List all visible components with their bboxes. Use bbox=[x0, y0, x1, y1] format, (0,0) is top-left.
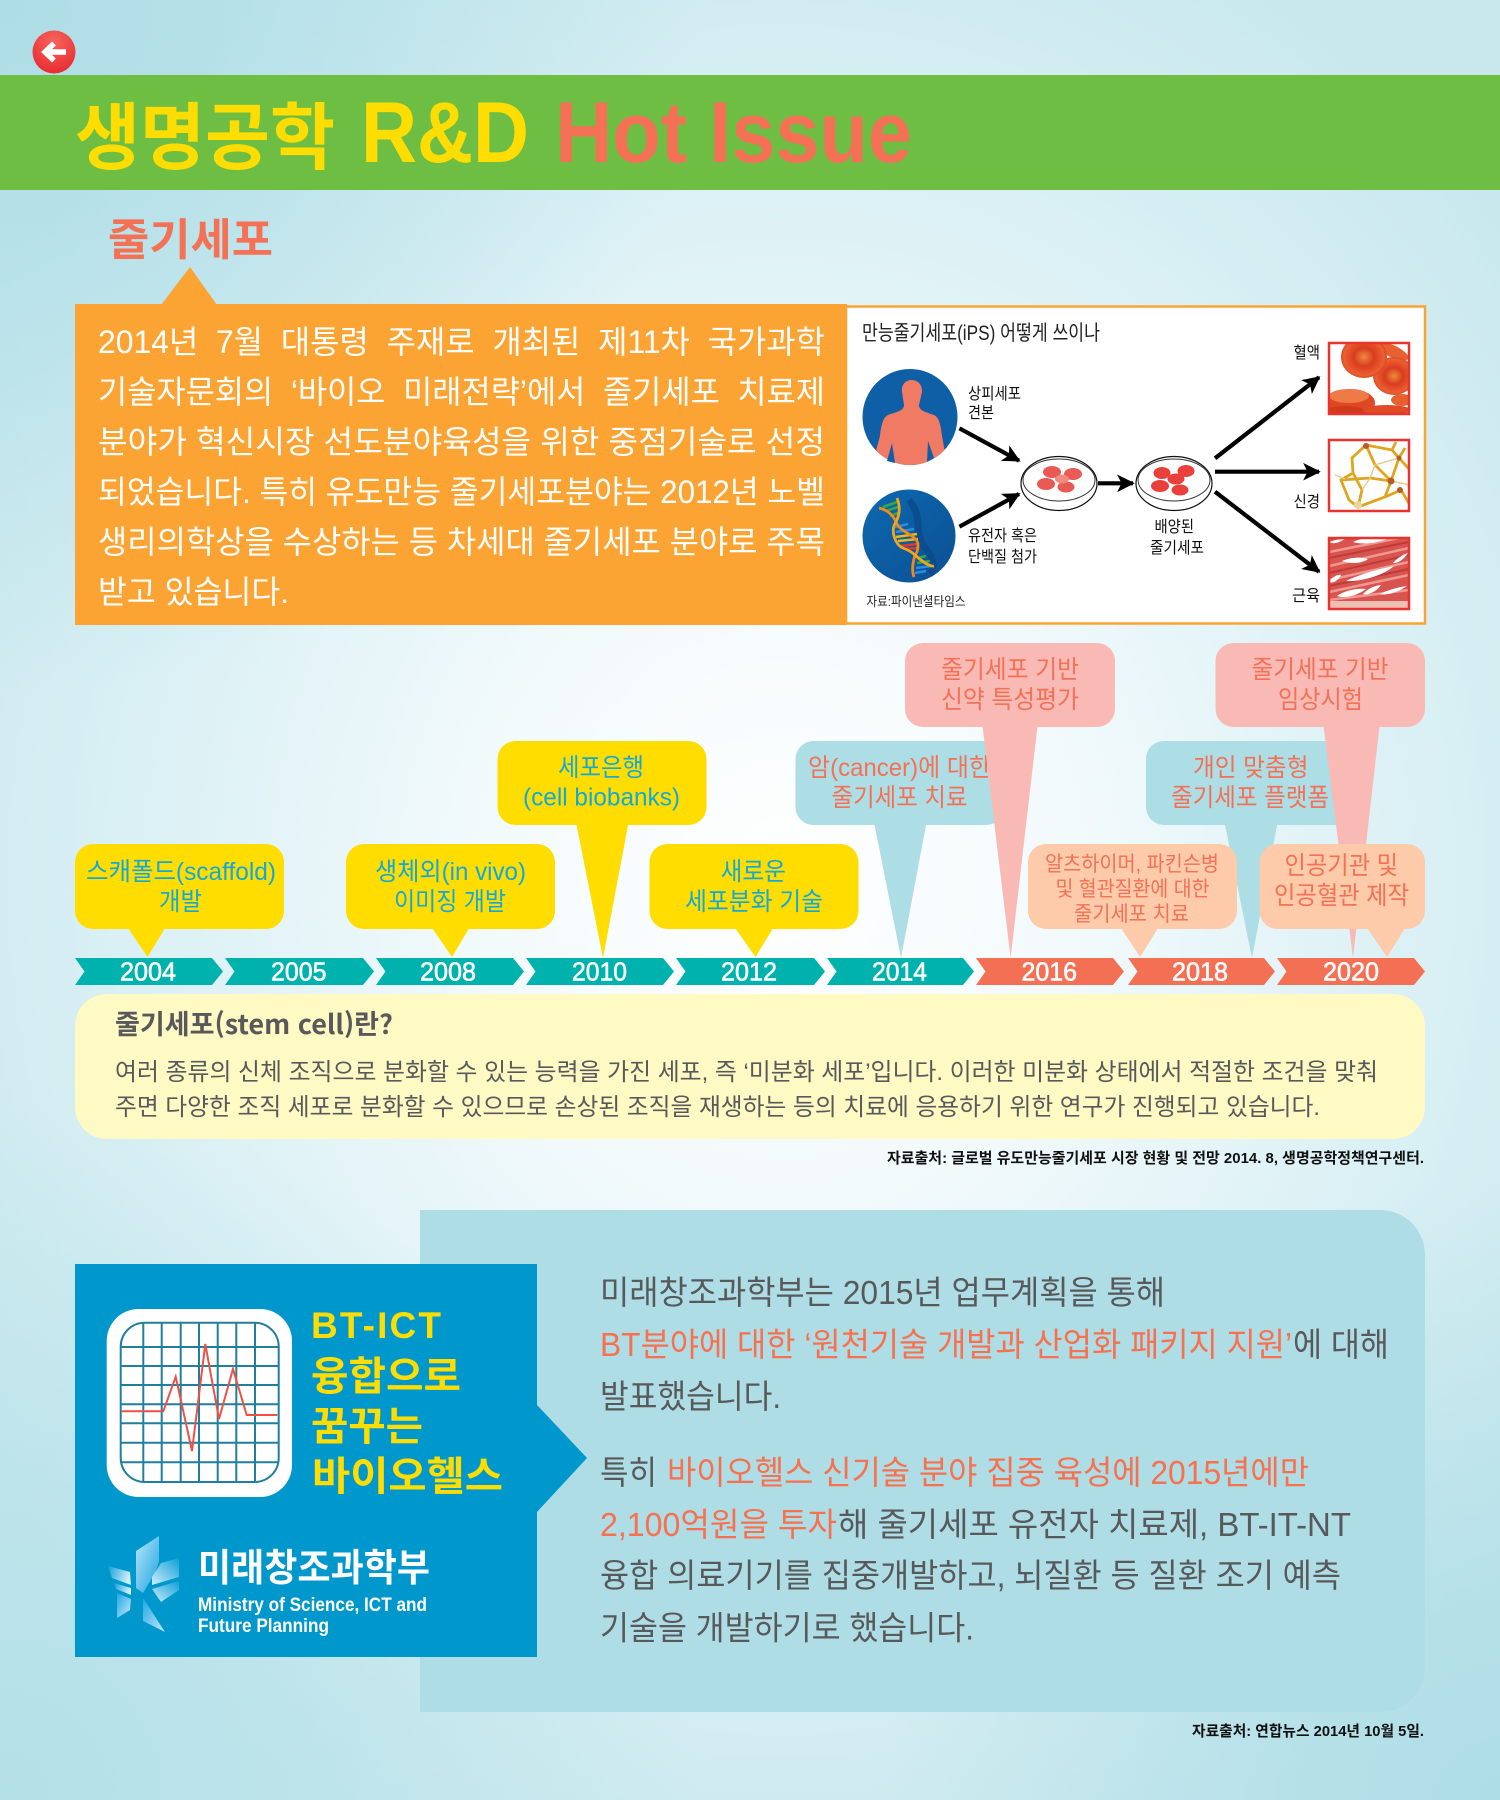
callout: artificial organs: 인공혈관 제작 bbox=[1274, 882, 1409, 910]
callout: neurological therapy: 및 혈관질환에 대한 bbox=[1056, 878, 1210, 901]
year 2008: 2008 bbox=[420, 956, 476, 986]
icon: back button bbox=[32, 30, 76, 74]
icon: cultured dish bbox=[1136, 456, 1212, 510]
year 2008 bbox=[376, 956, 524, 986]
panel body: 주면 다양한 조직 세포로 분화할 수 있으므로 손상된 조직을 재생하는 등의 치료에 응용하기 위한 연구가 진행되고 있습니다. bbox=[115, 1094, 1320, 1121]
label: add gene or protein: 유전자 혹은 bbox=[968, 527, 1037, 545]
callout: cancer therapy bbox=[796, 741, 1004, 958]
year 2018 bbox=[1128, 956, 1275, 986]
callout: drug evaluation: 신약 특성평가 bbox=[941, 686, 1079, 714]
callout: scaffold: 스캐폴드(scaffold) bbox=[86, 858, 276, 886]
timeline years bbox=[75, 956, 1425, 986]
callout: clinical trial bbox=[1216, 643, 1425, 958]
ministry name: Future Planning bbox=[198, 1616, 329, 1637]
icon: human body bbox=[862, 369, 958, 468]
timeline callouts bbox=[75, 643, 1425, 958]
label: muscle: 근육 bbox=[1292, 587, 1320, 605]
icon: DNA bbox=[862, 490, 956, 582]
title banner: Hot Issue bbox=[555, 85, 912, 181]
panel: BT-ICT text: 해 줄기세포 유전자 치료제, BT-IT-NT bbox=[838, 1506, 1351, 1543]
source note 2: 자료출처: 연합뉴스 2014년 10월 5일. bbox=[1192, 1723, 1424, 1740]
callout: cell biobanks: (cell biobanks) bbox=[523, 784, 680, 812]
panel: BT-ICT title block bbox=[75, 1264, 587, 1657]
source note 1: 자료출처: 글로벌 유도만능줄기세포 시장 현황 및 전망 2014. 8, 생명공학정책연구센터. bbox=[887, 1150, 1424, 1167]
panel title: 꿈꾸는 bbox=[311, 1405, 423, 1449]
callout: in vivo imaging bbox=[346, 844, 555, 957]
panel: BT-ICT text: 융합 의료기기를 집중개발하고, 뇌질환 등 질환 조기 예측 bbox=[600, 1557, 1341, 1594]
panel title: 융합으로 bbox=[311, 1355, 461, 1399]
callout: new differentiation: 세포분화 기술 bbox=[685, 888, 823, 916]
label: add gene or protein: 단백질 첨가 bbox=[968, 548, 1037, 566]
year 2010 bbox=[526, 956, 674, 986]
callout: scaffold: 개발 bbox=[159, 888, 202, 916]
callout: in vivo imaging: 생체외(in vivo) bbox=[375, 858, 526, 886]
year 2004 bbox=[75, 956, 223, 986]
label: epithelial cell sample: 견본 bbox=[968, 404, 994, 422]
panel: stem cell intro: 생리의학상을 수상하는 등 차세대 줄기세포 분야로 주목 bbox=[98, 524, 825, 560]
label: epithelial cell sample bbox=[968, 385, 1021, 422]
diagram title: 만능줄기세포(iPS) 어떻게 쓰이나 bbox=[862, 322, 1100, 345]
title banner: R&D bbox=[361, 85, 529, 181]
callout: personalized platform: 줄기세포 플랫폼 bbox=[1171, 784, 1329, 812]
label: blood: 혈액 bbox=[1294, 344, 1320, 362]
callout: scaffold bbox=[75, 844, 284, 957]
panel title bbox=[311, 1305, 503, 1499]
year 2012: 2012 bbox=[721, 956, 777, 986]
callout: artificial organs bbox=[1260, 844, 1425, 957]
panel: BT-ICT text: 기술을 개발하기로 했습니다. bbox=[600, 1610, 974, 1646]
year 2012 bbox=[676, 956, 825, 986]
year 2004: 2004 bbox=[120, 956, 176, 986]
icon: ECG monitor bbox=[107, 1309, 292, 1497]
year 2010: 2010 bbox=[572, 956, 627, 986]
year 2018: 2018 bbox=[1172, 956, 1228, 986]
callout: drug evaluation: 줄기세포 기반 bbox=[941, 656, 1079, 684]
diagram source: 자료:파이낸셜타임스 bbox=[866, 594, 966, 609]
panel: BT-ICT text: 2,100억원을 투자 bbox=[600, 1506, 837, 1543]
callout: cancer therapy: 줄기세포 치료 bbox=[832, 784, 968, 812]
icon: first culture dish bbox=[1021, 456, 1097, 510]
callout: personalized platform: 개인 맞춤형 bbox=[1193, 754, 1308, 782]
label: cultured stem cells bbox=[1150, 518, 1204, 557]
callout: new differentiation bbox=[650, 844, 858, 957]
title banner bbox=[0, 75, 1500, 190]
year 2014 bbox=[827, 956, 974, 986]
image: muscle fibres bbox=[1329, 536, 1409, 609]
section heading: stem cells: 줄기세포 bbox=[108, 204, 273, 268]
callout: cell biobanks bbox=[498, 741, 706, 958]
year 2014: 2014 bbox=[872, 956, 927, 986]
callout: drug evaluation bbox=[905, 643, 1115, 958]
label: cultured stem cells: 배양된 bbox=[1154, 518, 1194, 536]
year 2005: 2005 bbox=[271, 956, 326, 986]
year 2016 bbox=[976, 956, 1124, 986]
panel: stem cell intro bbox=[75, 267, 847, 625]
year 2020: 2020 bbox=[1323, 956, 1379, 986]
panel: BT-ICT text: 에 대해 bbox=[1293, 1326, 1389, 1363]
label: nerve: 신경 bbox=[1294, 493, 1320, 511]
label: cultured stem cells: 줄기세포 bbox=[1150, 539, 1204, 557]
panel: BT-ICT text bbox=[420, 1210, 1425, 1712]
panel: BT-ICT text: 특히 bbox=[600, 1454, 657, 1491]
callout: cell biobanks: 세포은행 bbox=[558, 754, 644, 782]
panel: BT-ICT text: 발표했습니다. bbox=[600, 1378, 781, 1415]
year 2005 bbox=[225, 956, 374, 986]
callout: neurological therapy bbox=[1028, 844, 1237, 957]
title banner: 생명공학 bbox=[75, 79, 335, 185]
panel: stem cell intro: 받고 있습니다. bbox=[98, 574, 289, 610]
callout: cancer therapy: 암(cancer)에 대한 bbox=[808, 754, 991, 782]
callout: artificial organs: 인공기관 및 bbox=[1284, 852, 1398, 880]
ministry name bbox=[198, 1537, 430, 1637]
panel: stem cell intro: 분야가 혁신시장 선도분야육성을 위한 중점기술로 선정 bbox=[98, 424, 825, 460]
panel: BT-ICT text: BT분야에 대한 ‘원천기술 개발과 산업화 패키지 지원’ bbox=[600, 1326, 1292, 1363]
panel: BT-ICT text: 미래창조과학부는 2015년 업무계획을 통해 bbox=[600, 1274, 1165, 1311]
image: nerve cells bbox=[1329, 440, 1410, 511]
panel: BT-ICT text: 바이오헬스 신기술 분야 집중 육성에 2015년에만 bbox=[667, 1454, 1309, 1491]
panel: iPS diagram bbox=[846, 306, 1425, 624]
panel: what is a stem cell bbox=[75, 994, 1425, 1139]
panel: stem cell intro: 되었습니다. 특히 유도만능 줄기세포분야는 2012년 노벨 bbox=[98, 474, 825, 510]
label: epithelial cell sample: 상피세포 bbox=[968, 385, 1021, 403]
callout: new differentiation: 새로운 bbox=[720, 858, 786, 886]
panel title: 바이오헬스 bbox=[312, 1455, 503, 1499]
ministry logo mark bbox=[108, 1536, 179, 1632]
panel body bbox=[115, 1059, 1378, 1121]
year 2016: 2016 bbox=[1022, 956, 1077, 986]
callout: in vivo imaging: 이미징 개발 bbox=[394, 888, 506, 916]
label: add gene or protein bbox=[968, 527, 1037, 566]
image: blood cells bbox=[1328, 342, 1410, 416]
panel body: 여러 종류의 신체 조직으로 분화할 수 있는 능력을 가진 세포, 즉 ‘미분화 세포’입니다. 이러한 미분화 상태에서 적절한 조건을 맞춰 bbox=[115, 1059, 1378, 1086]
callout: clinical trial: 줄기세포 기반 bbox=[1252, 656, 1388, 684]
callout: neurological therapy: 줄기세포 치료 bbox=[1074, 903, 1189, 926]
panel: stem cell intro: 기술자문회의 ‘바이오 미래전략’에서 줄기세포 치료제 bbox=[98, 374, 825, 410]
arrows bbox=[959, 377, 1319, 572]
callout: neurological therapy: 알츠하이머, 파킨슨병 bbox=[1045, 853, 1219, 876]
panel: stem cell intro: 2014년 7월 대통령 주재로 개최된 제11차 국가과학 bbox=[98, 324, 825, 360]
ministry name: 미래창조과학부 bbox=[198, 1537, 430, 1592]
callout: clinical trial: 임상시험 bbox=[1278, 686, 1363, 714]
panel heading: 줄기세포(stem cell)란? bbox=[115, 1003, 393, 1042]
ministry name: Ministry of Science, ICT and bbox=[198, 1595, 427, 1616]
panel title: BT-ICT bbox=[311, 1305, 441, 1346]
year 2020 bbox=[1277, 956, 1425, 986]
callout: personalized platform bbox=[1146, 741, 1355, 958]
